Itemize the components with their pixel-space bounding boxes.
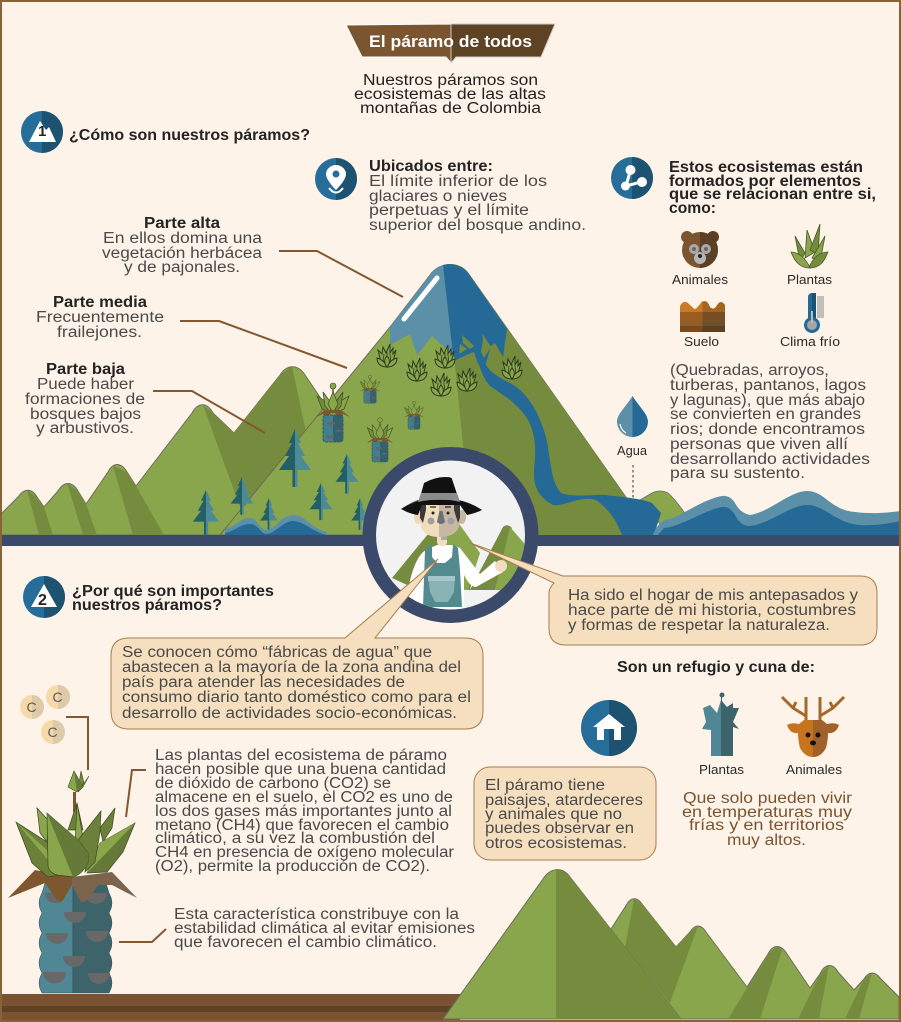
text block: parte baja: formaciones de bbox=[25, 391, 145, 408]
text block: parte alta: Parte alta bbox=[144, 215, 220, 232]
section 1 icon: mountain: 1 bbox=[38, 123, 46, 140]
text block: plantas del paramo: de dióxido de carbono (CO2) se bbox=[155, 775, 391, 792]
section 1 icon: mountain bbox=[21, 111, 63, 153]
callout: paisajes: otros ecosistemas. bbox=[485, 835, 627, 852]
text block: ubicados entre: superior del bosque andino. bbox=[369, 217, 586, 234]
section 2 heading: ¿Por qué son importantes bbox=[72, 583, 274, 600]
paragraph: quebradas: (Quebradas, arroyos, bbox=[670, 362, 829, 379]
scene: mountains, river and trees bbox=[0, 264, 901, 535]
text block: parte media: Parte media bbox=[53, 294, 147, 311]
carbon circles: C bbox=[48, 724, 58, 740]
paragraph: quebradas: rios; donde encontramos bbox=[670, 421, 865, 438]
collar bbox=[8, 870, 137, 902]
icon: thermometer bbox=[804, 293, 824, 333]
water right bbox=[653, 491, 901, 535]
text block: ubicados entre: perpetuas y el límite bbox=[369, 202, 529, 219]
text block: ubicados entre: glaciares o nieves bbox=[369, 188, 507, 205]
heading: refugio: Son un refugio y cuna de: bbox=[617, 659, 815, 676]
paragraph: quebradas: desarrollando actividades bbox=[670, 451, 870, 468]
ground bar bbox=[0, 535, 901, 546]
text block: refugio details: muy altos. bbox=[727, 832, 806, 849]
callout: fabricas de agua: desarrollo de actividades socio-económicas. bbox=[122, 705, 457, 722]
connector: parte alta bbox=[279, 251, 403, 297]
large frailejon plant bbox=[8, 771, 137, 993]
label plantas: Plantas bbox=[787, 272, 833, 287]
section 1 heading: ¿Cómo son nuestros páramos? bbox=[69, 127, 310, 144]
text block: refugio details: frías y en territorios bbox=[689, 817, 844, 834]
text block: elementos: como: bbox=[669, 200, 716, 217]
snow cap bbox=[390, 264, 507, 366]
callout: antepasados: hace parte de mi historia, costumbres bbox=[568, 602, 856, 619]
text block: ubicados entre: Ubicados entre: bbox=[369, 158, 493, 175]
small hill behind water bbox=[640, 491, 686, 530]
icon: water drop bbox=[617, 396, 648, 437]
dotted pointer: agua bbox=[632, 465, 634, 500]
icon: plant bbox=[791, 224, 828, 268]
paragraph: quebradas: para su sustento. bbox=[670, 465, 805, 482]
intro text: ecosistemas de las altas bbox=[354, 86, 546, 103]
text block: parte baja: bosques bajos bbox=[30, 406, 141, 423]
paragraph: quebradas: y lagunas), que más abajo bbox=[670, 392, 865, 409]
lake bbox=[225, 515, 327, 535]
icon: house bbox=[581, 700, 637, 756]
carbon circles: C bbox=[52, 689, 63, 705]
section 2 heading bbox=[72, 583, 274, 614]
text block: parte baja: Parte baja bbox=[46, 361, 125, 378]
paragraph: quebradas bbox=[670, 362, 870, 482]
intro text: montañas de Colombia bbox=[360, 100, 541, 117]
connector: parte baja bbox=[153, 391, 265, 433]
paramo tufts bbox=[377, 344, 522, 396]
label animales: Animales bbox=[672, 272, 729, 287]
paragraph: quebradas: personas que viven allí bbox=[670, 436, 849, 453]
callout: paisajes: puedes observar en bbox=[485, 820, 634, 837]
flower bud bbox=[68, 771, 89, 812]
label agua: Agua bbox=[617, 443, 648, 458]
callout: fabricas de agua bbox=[111, 559, 483, 729]
callout: fabricas de agua: abastecen a la mayoría de la zona andina del bbox=[122, 659, 461, 676]
text block: parte alta: y de pajonales. bbox=[124, 259, 240, 276]
paragraph: quebradas: se convierten en grandes bbox=[670, 406, 861, 423]
text block: parte alta: vegetación herbácea bbox=[102, 245, 262, 262]
text block: plantas del paramo bbox=[155, 747, 454, 875]
text block: ubicados entre: El límite inferior de los bbox=[369, 173, 547, 190]
label animales: Animales bbox=[786, 762, 843, 777]
intro text bbox=[354, 72, 546, 117]
trunk bbox=[39, 883, 112, 993]
text block: plantas del paramo: Las plantas del ecosistema de páramo bbox=[155, 747, 447, 764]
big mountain bbox=[220, 264, 655, 535]
text block: parte media: frailejones. bbox=[57, 324, 142, 341]
label clima frio: Clima frío bbox=[780, 334, 840, 349]
text block: plantas del paramo: CH4 en presencia de oxígeno molecular bbox=[155, 844, 454, 861]
text block: parte baja: y arbustivos. bbox=[36, 420, 134, 437]
back hills left bbox=[0, 366, 330, 535]
callout: paisajes: El páramo tiene bbox=[485, 777, 605, 794]
connector: estabilidad bbox=[119, 929, 166, 942]
text block: estabilidad climatica: estabilidad climática al evitar emisiones bbox=[174, 920, 475, 937]
text block: parte baja: Puede haber bbox=[37, 376, 134, 393]
carbon circles: C bbox=[26, 699, 37, 715]
icon: bear bbox=[681, 231, 719, 268]
icon: location pin bbox=[315, 158, 357, 200]
callout: fabricas de agua: Se conocen cómo “fábricas de agua” que bbox=[122, 644, 432, 661]
intro text: Nuestros páramos son bbox=[363, 72, 538, 89]
banner title: El páramo de todos bbox=[369, 32, 532, 51]
callout: paisajes: paisajes, atardeceres bbox=[485, 792, 643, 809]
text block: plantas del paramo: almacene en el suelo, el CO2 es uno de bbox=[155, 789, 453, 806]
text block: parte alta bbox=[102, 215, 262, 276]
portrait circle: campesino bbox=[362, 447, 538, 623]
text block: parte media bbox=[36, 294, 164, 341]
text block: plantas del paramo: hacen posible que una buena cantidad bbox=[155, 761, 446, 778]
text block: estabilidad climatica bbox=[174, 906, 475, 951]
section 2 icon bbox=[23, 576, 65, 618]
text block: refugio details bbox=[682, 790, 852, 849]
text block: ubicados entre bbox=[369, 158, 586, 234]
section 2 icon: 2 bbox=[38, 592, 47, 609]
icon: frailejon silhouette bbox=[702, 692, 739, 756]
frailejones bbox=[316, 375, 424, 462]
text block: parte baja bbox=[25, 361, 145, 437]
callout: antepasados: y formas de respetar la naturaleza. bbox=[568, 617, 830, 634]
text block: plantas del paramo: los dos gases más importantes junto al bbox=[155, 803, 452, 820]
text block: estabilidad climatica: Esta característica constribuye con la bbox=[174, 906, 459, 923]
icon: deer bbox=[782, 697, 844, 757]
connector: plantas bbox=[126, 770, 146, 817]
callout: paisajes bbox=[474, 767, 656, 860]
banner title bbox=[346, 24, 555, 63]
text block: plantas del paramo: metano (CH4) que favorecen el cambio bbox=[155, 817, 449, 834]
callout: antepasados bbox=[470, 543, 877, 645]
rosette leaves bbox=[16, 803, 135, 877]
text block: plantas del paramo: climático, a su vez la combustión del bbox=[155, 830, 435, 847]
callout: fabricas de agua: consumo diario tanto doméstico como para el bbox=[122, 689, 471, 706]
callout: antepasados: Ha sido el hogar de mis antepasados y bbox=[568, 587, 858, 604]
connector: parte media bbox=[180, 321, 347, 368]
icon: network bbox=[611, 157, 653, 199]
river bbox=[478, 362, 661, 535]
paragraph: quebradas: turberas, pantanos, lagos bbox=[670, 377, 866, 394]
trees bbox=[193, 429, 369, 535]
text block: plantas del paramo: (O2), permite la producción de CO2). bbox=[155, 858, 430, 875]
ground strip bbox=[0, 994, 460, 1020]
connector: carbon bbox=[66, 717, 88, 770]
text block: elementos: Estos ecosistemas están bbox=[669, 159, 863, 176]
text block: estabilidad climatica: que favorecen el cambio climático. bbox=[174, 934, 437, 951]
carbon circles bbox=[20, 685, 70, 744]
text block: refugio details: en temperaturas muy bbox=[682, 804, 852, 821]
section 2 heading: nuestros páramos? bbox=[72, 597, 222, 614]
text block: elementos: formados por elementos bbox=[669, 173, 861, 190]
callout: fabricas de agua: país para atender las necesidades de bbox=[122, 674, 405, 691]
text block: refugio details: Que solo pueden vivir bbox=[683, 790, 852, 807]
text block: parte media: Frecuentemente bbox=[36, 309, 164, 326]
label plantas: Plantas bbox=[699, 762, 745, 777]
text block: parte alta: En ellos domina una bbox=[103, 230, 262, 247]
callout: paisajes: y animales que no bbox=[485, 806, 622, 823]
text block: elementos bbox=[669, 159, 876, 217]
text block: elementos: que se relacionan entre si, bbox=[669, 186, 876, 203]
label suelo: Suelo bbox=[684, 334, 719, 349]
icon: soil bbox=[680, 301, 725, 332]
bottom right mountains bbox=[443, 870, 899, 1019]
